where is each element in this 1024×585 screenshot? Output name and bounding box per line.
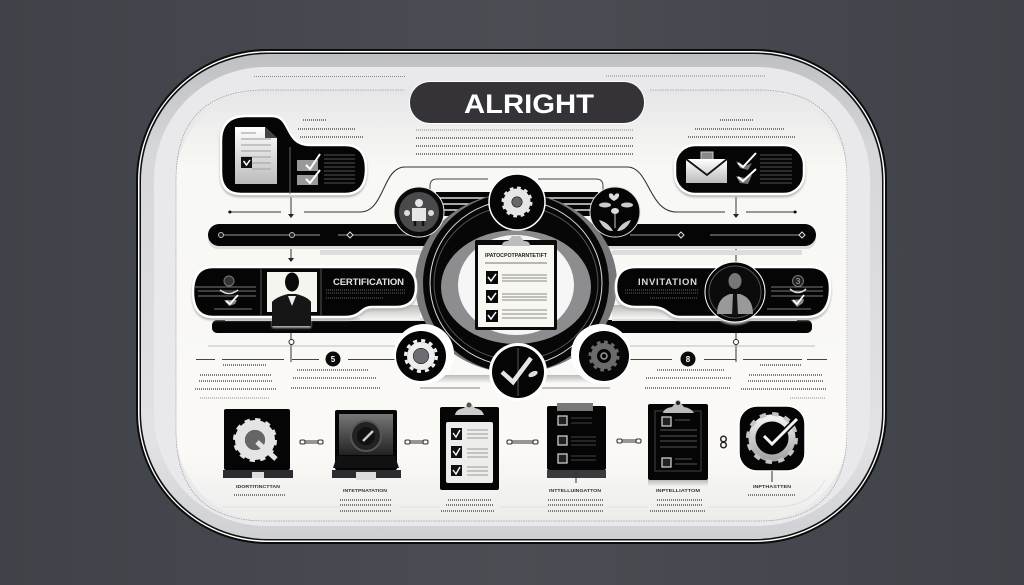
icon: document [235, 127, 277, 184]
icon: flower [590, 187, 640, 237]
label: IDORTITINCTTAN [236, 484, 281, 490]
step 6: implementation complete [739, 406, 805, 495]
icon: badge [351, 421, 381, 451]
step baseline [222, 480, 825, 507]
icon: person medallion [705, 262, 765, 322]
step 5: implementation [648, 400, 708, 511]
lower bar [212, 305, 812, 333]
text block lines right [645, 365, 827, 398]
link [507, 440, 538, 444]
central clipboard [475, 236, 557, 330]
label: certification: CERTIFICATION [333, 277, 404, 288]
label: INTTELLUINGATTON [549, 488, 602, 494]
link [405, 440, 428, 444]
number badge 5 [326, 352, 340, 366]
icon: check marks [736, 153, 756, 184]
intro text lines [416, 130, 634, 154]
panel: outer frame [136, 49, 887, 544]
checklist [486, 271, 547, 322]
icon: badge and check [767, 276, 823, 309]
icon: envelope [686, 152, 727, 183]
label: INPTELLIATTOM [656, 488, 700, 494]
icon: gear with check [748, 414, 797, 462]
card: invitation [616, 262, 830, 322]
link [300, 440, 323, 444]
title banner [409, 81, 645, 124]
connector lines [196, 167, 827, 362]
icon: gear bottom right [571, 324, 631, 384]
icon: check bottom [489, 343, 547, 401]
icon: gear with wrench [234, 420, 276, 460]
icon: badge and check [195, 276, 256, 309]
central ring [415, 193, 617, 373]
icon: gear bottom left [394, 324, 454, 384]
icon: people [394, 187, 444, 237]
caption lines right [688, 120, 795, 137]
number badge 5: 5 [331, 355, 336, 364]
icon: gear top [489, 174, 545, 230]
label: invitation: INVITATION [638, 277, 697, 288]
title banner: ALRIGHT [464, 89, 595, 119]
step 2: interpretation [332, 410, 401, 511]
step 4: installation [547, 403, 606, 511]
link [617, 439, 641, 443]
step 3: clipboard [440, 402, 499, 511]
caption lines left [298, 120, 364, 137]
number badge 8 [680, 352, 696, 366]
label: INPTHASTTEN [753, 484, 792, 490]
top shelves behind ring [420, 179, 610, 388]
card: certification [193, 267, 416, 326]
step 1: identification [223, 409, 293, 495]
timeline bar [208, 224, 816, 255]
text block lines left [195, 365, 380, 398]
clipboard heading: IPATOCPOTPARNTETIFT [485, 253, 548, 259]
link [721, 436, 726, 448]
number badge 8: 8 [686, 355, 691, 364]
icon: check boxes [297, 154, 320, 185]
icon: badge and check: 3 [796, 277, 801, 286]
card: envelope checklist [675, 145, 804, 194]
label: INTETPNATATION [343, 488, 388, 494]
photo: person [267, 272, 317, 326]
card: document checklist [221, 116, 366, 194]
